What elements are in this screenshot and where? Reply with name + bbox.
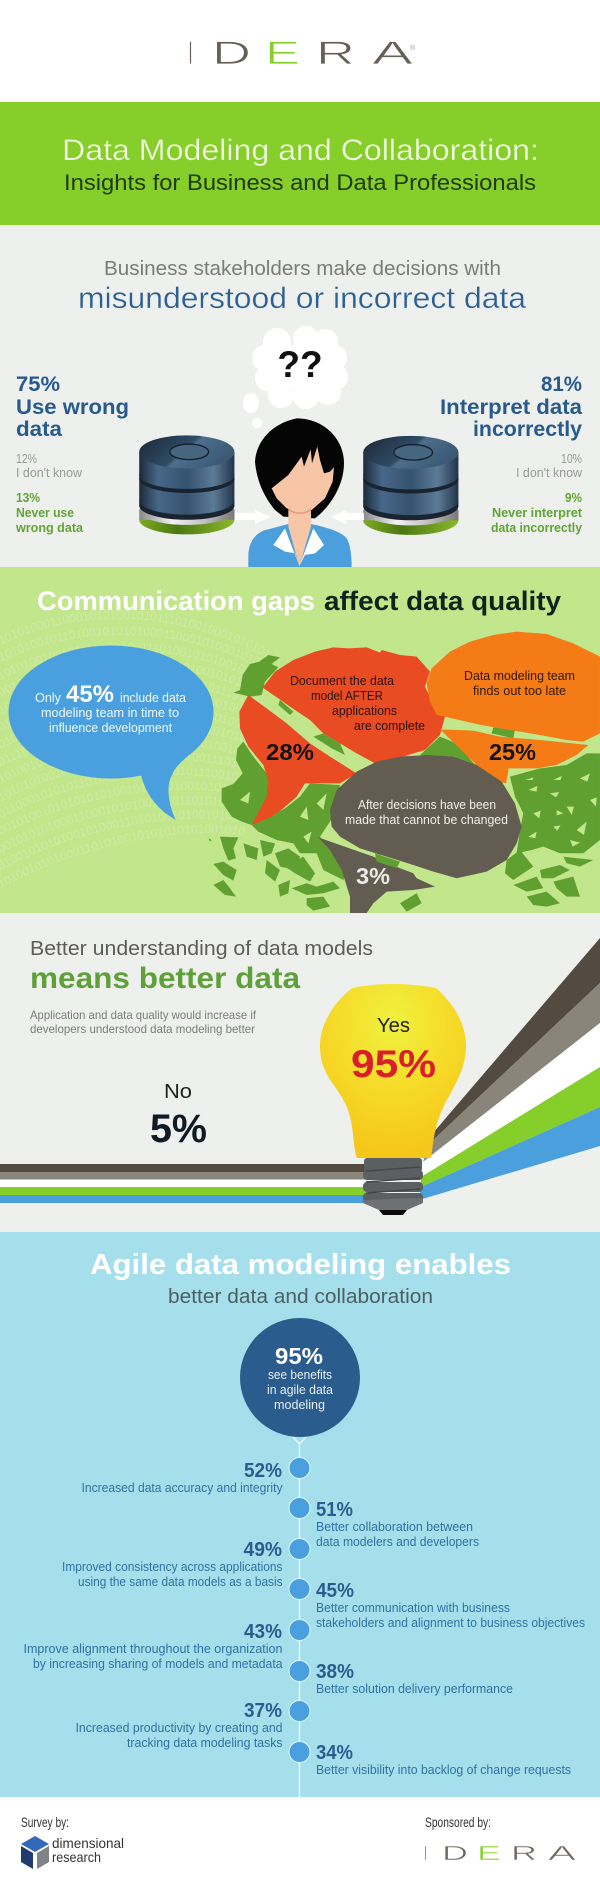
logo: IDERA footer: E — [477, 1842, 501, 1865]
item: 43%: Improve alignment throughout the organization — [24, 1641, 282, 1656]
stat: use wrong data: Never use — [16, 505, 74, 520]
bubble: 45% include team: modeling team in time to — [41, 705, 179, 720]
stat: interpret data incorrectly: incorrectly — [473, 418, 582, 441]
bubble: after decisions 3%: After decisions have been — [358, 797, 496, 812]
title banner — [0, 102, 600, 225]
green paint splatter — [208, 655, 600, 912]
footer: survey by: research — [52, 1849, 101, 1865]
bubble: document after 28% — [239, 647, 445, 825]
item: 45%: stakeholders and alignment to business objectives — [316, 1615, 585, 1630]
bubble: 45% include team: include data — [120, 690, 187, 705]
logo: IDERA footer — [424, 1842, 577, 1865]
item: 51%: Better collaboration between — [316, 1519, 473, 1534]
item: 51%: data modelers and developers — [316, 1534, 479, 1549]
bubble: 45% include team: influence development — [49, 720, 172, 735]
heading: means better data — [30, 938, 373, 995]
stat: use wrong data: 12% — [16, 451, 37, 466]
stat: use wrong data — [15, 373, 129, 535]
footer: sponsored by — [424, 1814, 577, 1865]
heading: agile: Agile data modeling enables — [90, 1249, 511, 1281]
bubble: document after 28%: 28% — [266, 739, 314, 765]
text: application quality — [30, 1008, 257, 1036]
item: 37% — [76, 1700, 283, 1750]
item: 45%: 45% — [316, 1580, 354, 1602]
item: 38%: 38% — [316, 1661, 354, 1683]
stat: interpret data incorrectly: 9% — [565, 490, 582, 505]
circle: 95% see benefits — [240, 1318, 360, 1437]
item: 49% — [62, 1539, 283, 1589]
circle: 95% see benefits: modeling — [274, 1397, 325, 1412]
text: application quality: Application and data quality would increase if — [30, 1008, 257, 1022]
bubble: finds out too late 25%: 25% — [489, 739, 536, 765]
heading: stakeholders: misunderstood or incorrect data — [78, 282, 526, 315]
circle: 95% see benefits: see benefits — [268, 1367, 332, 1382]
logo: IDERA header: R — [316, 35, 355, 71]
footer: survey by — [21, 1814, 124, 1869]
stat: interpret data incorrectly — [440, 373, 583, 535]
bubble: finds out too late 25% — [427, 632, 600, 783]
stat: no 5% — [150, 1081, 207, 1151]
heading: means better data: means better data — [30, 962, 300, 995]
heading: stakeholders — [78, 258, 526, 315]
item: 51%: 51% — [316, 1499, 353, 1521]
logo: IDERA footer: A — [548, 1842, 577, 1865]
heading: communication gaps: affect data quality — [324, 586, 561, 616]
text: application quality: developers understood data modeling better — [30, 1022, 255, 1036]
stat: use wrong data: wrong data — [15, 520, 84, 535]
logo: IDERA header — [188, 35, 416, 71]
stat: interpret data incorrectly: Interpret data — [440, 396, 582, 419]
stat: yes 95% — [351, 1015, 436, 1086]
bubble: 45% include team: Only — [35, 690, 61, 705]
item: 49%: using the same data models as a basis — [78, 1574, 283, 1589]
heading: agile: better data and collaboration — [168, 1286, 433, 1308]
background binary pattern — [0, 610, 270, 888]
icon: dimensional research cube — [21, 1836, 49, 1869]
icon: database right — [363, 436, 458, 535]
item: 52% — [82, 1460, 283, 1495]
item: 51% — [316, 1499, 479, 1549]
footer: survey by: Survey by: — [21, 1814, 69, 1830]
stat: use wrong data: 75% — [16, 373, 60, 396]
icon: thought cloud: ?? — [277, 344, 323, 385]
icon: thought cloud — [243, 326, 348, 428]
bubble: finds out too late 25%: Data modeling team — [464, 668, 575, 683]
stat: interpret data incorrectly: I don't know — [516, 465, 583, 480]
stat: use wrong data: Use wrong — [16, 396, 129, 419]
bubble: 45% include team — [8, 646, 214, 820]
title banner: Insights for Business and Data Professionals — [64, 170, 536, 195]
item: 43%: 43% — [244, 1621, 282, 1643]
logo: IDERA header: ® — [410, 44, 416, 52]
logo: IDERA footer: D — [442, 1842, 468, 1865]
logo: IDERA footer: R — [511, 1842, 537, 1865]
bubble: after decisions 3%: 3% — [356, 863, 390, 889]
item: 49%: 49% — [244, 1539, 282, 1561]
timeline line — [293, 1437, 306, 1797]
item: 34% — [316, 1742, 571, 1777]
footer: sponsored by: Sponsored by: — [425, 1814, 491, 1830]
bubble: 45% include team: 45% — [66, 681, 114, 708]
item: 52%: 52% — [244, 1460, 282, 1482]
arrow: left database to woman — [235, 510, 270, 524]
item: 37%: 37% — [244, 1700, 282, 1722]
item: 52%: Increased data accuracy and integrity — [82, 1480, 283, 1495]
item: 45%: Better communication with business — [316, 1600, 510, 1615]
circle: 95% see benefits: 95% — [275, 1343, 323, 1369]
logo: IDERA header: E — [265, 35, 300, 71]
stat: interpret data incorrectly: Never interpret — [492, 505, 583, 520]
logo: IDERA header: A — [372, 35, 414, 71]
panel: agile data modeling — [0, 1232, 600, 1797]
bubble: after decisions 3%: made that cannot be changed — [345, 812, 508, 827]
circle: 95% see benefits: in agile data — [267, 1382, 334, 1397]
bubble: document after 28%: Document the data — [290, 673, 395, 688]
heading: agile — [90, 1249, 511, 1308]
item: 43% — [24, 1621, 283, 1671]
stat: use wrong data: data — [16, 418, 62, 441]
timeline dots — [289, 1458, 310, 1762]
stat: no 5%: 5% — [150, 1107, 207, 1151]
item: 34%: 34% — [316, 1742, 353, 1764]
icon: light bulb — [320, 984, 466, 1215]
stat: interpret data incorrectly: data incorrectly — [491, 520, 583, 535]
item: 38%: Better solution delivery performance — [316, 1681, 513, 1696]
heading: means better data: Better understanding of data models — [30, 938, 373, 960]
panel: communication gaps — [0, 567, 600, 913]
stat: interpret data incorrectly: 81% — [541, 373, 582, 396]
item: 45% — [316, 1580, 585, 1630]
stat: interpret data incorrectly: 10% — [561, 451, 582, 466]
logo: IDERA header: D — [212, 35, 251, 71]
item: 37%: Increased productivity by creating and — [76, 1720, 282, 1735]
icon: woman — [248, 418, 352, 567]
item: 49%: Improved consistency across applications — [62, 1559, 283, 1574]
stripes: right fan — [419, 938, 600, 1200]
logo: IDERA footer: I — [424, 1842, 427, 1865]
item: 34%: Better visibility into backlog of change requests — [316, 1762, 571, 1777]
item: 38% — [316, 1661, 513, 1696]
stat: use wrong data: I don't know — [16, 465, 83, 480]
stat: no 5%: No — [164, 1081, 192, 1103]
item: 37%: tracking data modeling tasks — [127, 1735, 283, 1750]
arrow: right database to woman — [331, 510, 364, 524]
title banner: Data Modeling and Collaboration: — [62, 134, 539, 167]
heading: communication gaps — [37, 586, 561, 616]
stat: yes 95%: 95% — [351, 1043, 436, 1086]
panel: misunderstood data — [0, 225, 600, 567]
icon: database left — [139, 435, 234, 534]
bubble: document after 28%: applications — [332, 703, 397, 718]
bubble: finds out too late 25%: finds out too late — [473, 683, 566, 698]
bubble: after decisions 3% — [318, 755, 522, 913]
item: 43%: by increasing sharing of models and metadata — [33, 1656, 283, 1671]
stripes: left bands — [0, 1164, 366, 1203]
bubble: document after 28%: are complete — [354, 718, 425, 733]
heading: communication gaps: Communication gaps — [37, 586, 315, 616]
stat: yes 95%: Yes — [377, 1015, 410, 1037]
panel: better understanding — [0, 913, 600, 1232]
logo: IDERA header: I — [188, 35, 193, 71]
bubble: document after 28%: model AFTER — [311, 688, 383, 703]
heading: stakeholders: Business stakeholders make decisions with — [104, 258, 501, 280]
stat: use wrong data: 13% — [16, 490, 40, 505]
footer: survey by: dimensional — [52, 1835, 124, 1851]
